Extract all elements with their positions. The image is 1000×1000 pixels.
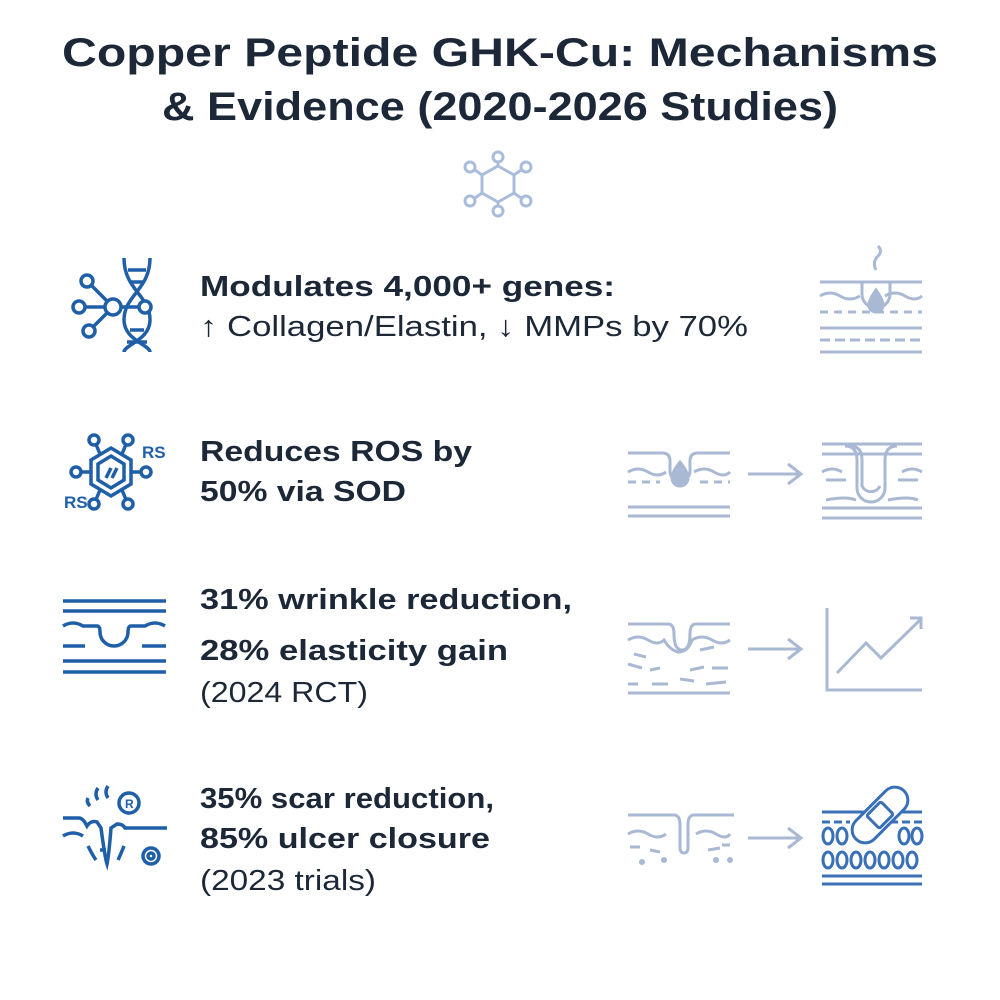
row 4 right: scar to bandage: [628, 815, 801, 864]
row 2 right: skin with drop to healed: [628, 444, 922, 518]
icon: header molecule: [465, 152, 531, 216]
row 4 text: 35% scar reduction,: [200, 783, 494, 815]
row 4 text: [200, 783, 494, 897]
row 4 icon: scar: [63, 786, 167, 864]
title: & Evidence (2020-2026 Studies): [162, 85, 838, 129]
row 3 text: [200, 584, 572, 709]
title: Copper Peptide GHK-Cu: Mechanisms: [62, 31, 938, 75]
row 1 icon: DNA network: [73, 258, 151, 352]
row 1 text: ↑ Collagen/Elastin, ↓ MMPs by 70%: [200, 311, 748, 343]
text: R: [125, 797, 134, 811]
icon: bandage skin: [822, 782, 922, 884]
row 4 text: 85% ulcer closure: [200, 823, 490, 855]
row 2 text: Reduces ROS by: [200, 436, 472, 468]
row 3 right: wrinkle skin to chart: [628, 608, 922, 693]
RS labels: RS: [64, 493, 88, 512]
row 4 text: (2023 trials): [200, 865, 376, 897]
row 3 text: (2024 RCT): [200, 677, 368, 709]
row 3 text: 28% elasticity gain: [200, 635, 508, 667]
row 2 icon: molecule RS: [71, 435, 151, 509]
row 1 right icon: skin with drop: [820, 246, 922, 352]
row 1 text: Modulates 4,000+ genes:: [200, 271, 615, 303]
RS labels: RS: [142, 443, 166, 462]
row 3 text: 31% wrinkle reduction,: [200, 584, 572, 616]
row 2 text: 50% via SOD: [200, 476, 406, 508]
title: [62, 31, 938, 129]
RS labels: [64, 443, 166, 512]
row 1 text: [200, 271, 748, 343]
row 3 icon: skin wrinkle: [63, 601, 166, 672]
row 2 text: [200, 436, 472, 508]
